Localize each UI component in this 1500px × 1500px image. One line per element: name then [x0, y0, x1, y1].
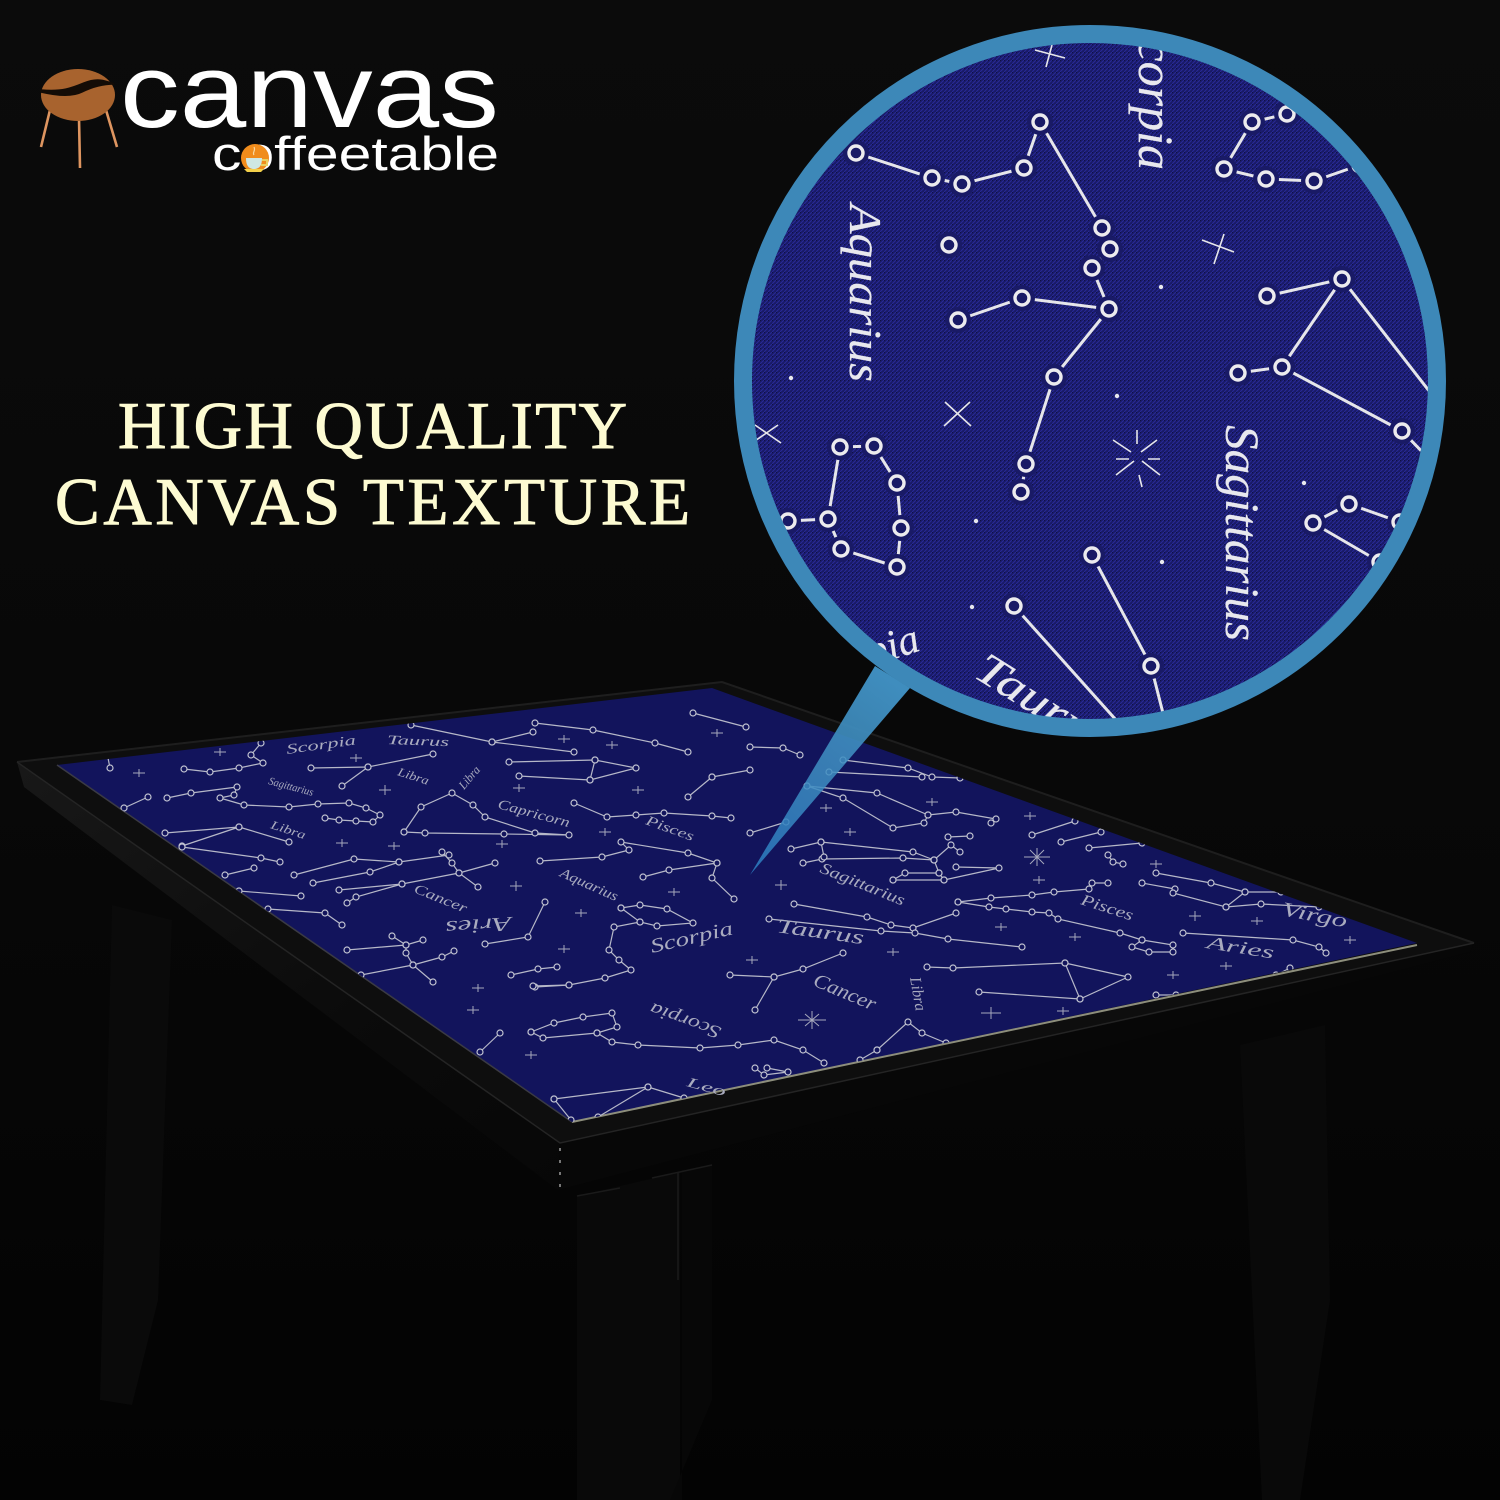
table labels: Virgo — [1280, 898, 1349, 933]
lens labels: Taurus — [967, 643, 1120, 764]
table labels: Sagittarius — [818, 860, 907, 909]
table labels: Sagittarius — [267, 775, 315, 799]
lens ring — [743, 34, 1437, 728]
lens sparkles — [752, 45, 1234, 487]
lens labels: Aquarius — [840, 201, 891, 382]
table labels: Taurus — [387, 732, 449, 749]
logo — [41, 33, 499, 180]
table labels — [267, 732, 1349, 1100]
logo icon: coffee bean table — [41, 69, 117, 168]
table labels: Aquarius — [556, 865, 621, 905]
constellations on table — [105, 713, 1326, 1120]
table labels: Pisces — [642, 813, 696, 845]
lens labels: Sagittarius — [1215, 425, 1268, 641]
lens constellations — [788, 114, 1440, 730]
table legs — [100, 905, 1330, 1500]
table labels: Leo — [683, 1075, 727, 1100]
headline — [55, 389, 690, 539]
table labels: Scorpia — [648, 918, 735, 958]
headline: HIGH QUALITY — [118, 389, 627, 463]
logo wordmark: canvas — [120, 33, 499, 150]
table labels: Aries — [1204, 932, 1276, 963]
logo icon: coffee cup — [241, 144, 269, 172]
table labels: Libra — [455, 763, 483, 793]
lens dots — [789, 285, 1306, 609]
callout wedge — [750, 666, 910, 875]
table labels: Taurus — [775, 915, 866, 949]
table labels: Pisces — [1078, 891, 1135, 924]
table labels: Libra — [268, 817, 308, 842]
headline: CANVAS TEXTURE — [55, 465, 690, 539]
table labels: Capricorn — [496, 797, 571, 831]
lens labels: Scorpia — [1128, 14, 1184, 170]
table labels: Cancer — [810, 969, 880, 1015]
sparkles on table — [133, 729, 1356, 1059]
canvas table top — [57, 688, 1417, 1122]
table labels: Scorpia — [647, 999, 723, 1043]
lens labels — [787, 14, 1268, 764]
table labels: Aries — [444, 912, 515, 939]
lens fabric — [750, 41, 1430, 721]
table labels: Cancer — [412, 882, 470, 917]
magnifier lens — [743, 14, 1440, 764]
lens labels: Scorpia — [787, 616, 925, 700]
logo sub-wordmark: coffeetable — [212, 127, 499, 180]
table labels: Libra — [906, 975, 929, 1012]
table labels: Scorpia — [285, 733, 357, 758]
table frame — [17, 682, 1474, 1190]
table labels: Libra — [395, 764, 431, 788]
